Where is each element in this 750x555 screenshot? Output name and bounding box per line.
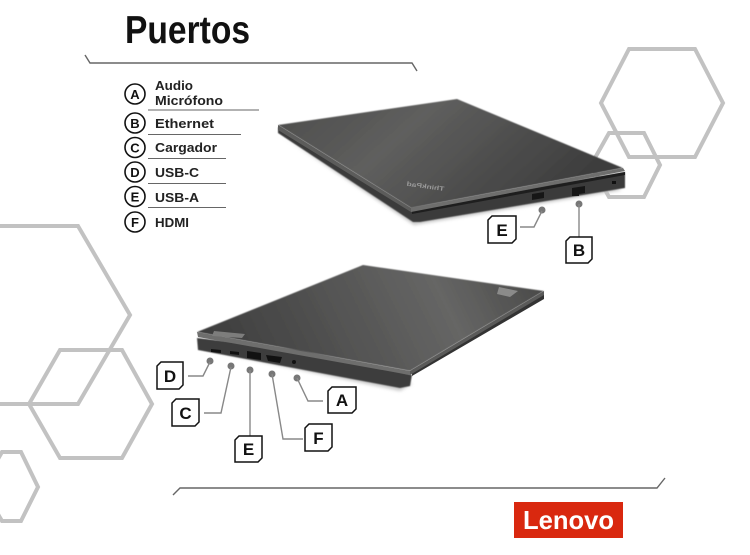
callout E (lower)	[235, 366, 262, 462]
legend item E	[125, 186, 226, 208]
callout B	[566, 200, 592, 263]
title: Puertos	[125, 9, 250, 52]
legend item C	[125, 138, 226, 158]
legend item A: Audio	[155, 78, 193, 93]
laptop logo: ThinkPad	[406, 180, 445, 193]
legend item C: Cargador	[155, 140, 217, 155]
legend item E: USB-A	[155, 190, 200, 205]
legend item D	[125, 162, 226, 184]
laptop: upper view	[278, 99, 625, 225]
callout A	[294, 374, 356, 413]
callout A: A	[336, 391, 348, 410]
legend item F: F	[131, 215, 139, 230]
legend item B: Ethernet	[155, 116, 215, 131]
bottom rule	[173, 478, 665, 495]
title rule	[85, 55, 417, 71]
callout B: B	[573, 241, 585, 260]
legend item C: C	[130, 140, 140, 156]
legend item D: D	[130, 165, 140, 180]
Lenovo logo: Lenovo	[523, 505, 614, 535]
callout E (upper)	[488, 206, 546, 243]
lid logo: ThinkPad mark	[497, 287, 518, 297]
legend item B	[125, 113, 241, 134]
legend item F	[125, 212, 189, 232]
callout F: F	[313, 429, 324, 448]
legend item B: B	[130, 116, 140, 131]
laptop: lower view	[197, 265, 544, 391]
legend	[125, 78, 259, 232]
legend item A	[125, 78, 259, 110]
callout F	[268, 370, 332, 451]
legend item A: A	[130, 87, 140, 102]
legend item E: E	[131, 190, 140, 204]
lid logo: Lenovo	[212, 331, 245, 338]
callout D	[157, 358, 214, 389]
legend item A: Micrófono	[155, 93, 223, 108]
callout C: C	[179, 404, 192, 423]
callout D: D	[164, 367, 176, 386]
legend item F: HDMI	[155, 215, 189, 230]
callout E (upper): E	[496, 221, 508, 240]
callout C	[172, 362, 234, 426]
callout E (lower): E	[243, 440, 254, 459]
legend item D: USB-C	[155, 165, 200, 180]
